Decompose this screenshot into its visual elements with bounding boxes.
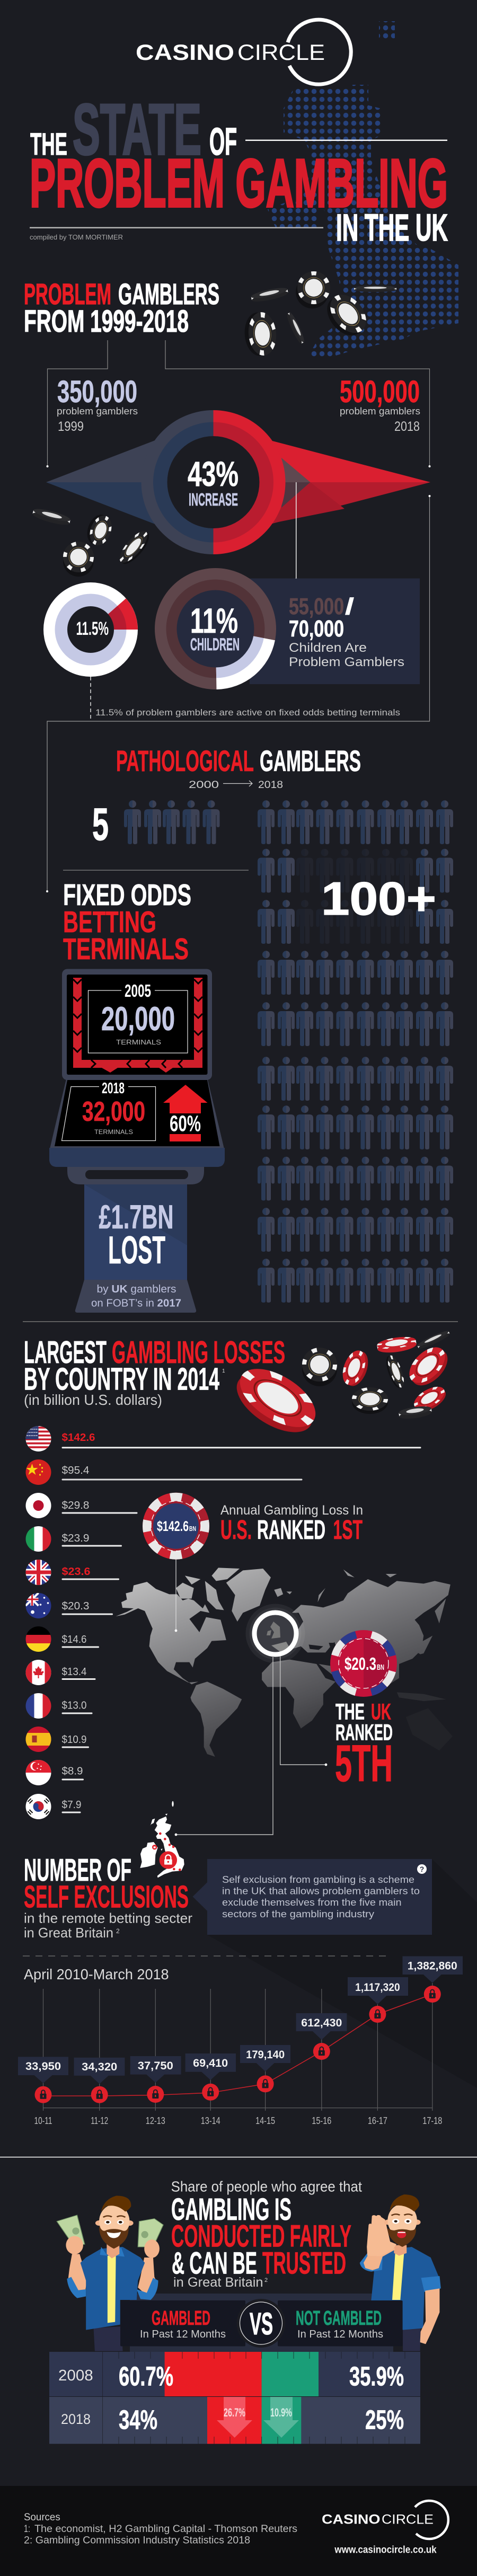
logo: CASINO <box>136 40 234 65</box>
stat: 500,000 in 2018: problem gamblers <box>340 406 420 417</box>
divider line <box>23 1321 458 1322</box>
sources: 1: <box>24 2524 30 2535</box>
footer <box>0 2486 477 2576</box>
column with losses: by UK gamblers <box>96 1283 176 1295</box>
heading: pathological gamblers: 2000 <box>189 780 219 791</box>
compass chart: 43% increase: 43% <box>188 454 238 493</box>
heading: number of self exclusions <box>24 1853 192 1941</box>
column with losses: on FOBT’s in 2017 <box>91 1297 181 1309</box>
callout text: US ranked 1st: 1ST <box>333 1515 363 1545</box>
heading: share of people: in Great Britain <box>173 2275 263 2290</box>
title: STATE <box>73 89 201 170</box>
title <box>30 89 448 249</box>
panel: children: Problem Gamblers <box>289 655 404 669</box>
heading: pathological gamblers: GAMBLERS <box>260 744 361 777</box>
VS badge <box>236 2299 285 2348</box>
panel: self exclusion explanation: sectors of the gambling industry <box>222 1909 374 1919</box>
2018 box: 2018 <box>102 1080 125 1097</box>
bar: Singapore <box>25 1760 84 1785</box>
data point 14-15 <box>240 2045 290 2126</box>
row 2018: 25% <box>365 2405 404 2435</box>
footer logo <box>322 2501 448 2556</box>
icon: question mark <box>417 1864 427 1874</box>
heading: fixed odds betting terminals: FIXED ODDS <box>63 878 191 912</box>
donut chart: 11.5% <box>43 582 138 677</box>
arrow: gambled down 26.7% <box>217 2397 252 2438</box>
data point 17-18: 1,382,860 <box>408 1960 457 1972</box>
VS badge: VS <box>250 2307 273 2341</box>
betting terminal machine <box>49 969 225 1313</box>
backing strip behind versus panels <box>130 2294 393 2352</box>
callout: US chip: BN <box>189 1525 196 1533</box>
2018 box <box>61 1080 156 1140</box>
heading: problem gamblers <box>24 277 219 339</box>
heading: largest gambling losses: LARGEST <box>24 1335 107 1370</box>
bar: South Korea: $7.9 <box>61 1799 82 1811</box>
heading: fixed odds betting terminals: TERMINALS <box>63 932 189 966</box>
connector frame lines <box>47 340 430 467</box>
panel: children: 70,000 <box>289 616 344 642</box>
heading: problem gamblers: PROBLEM <box>24 277 111 311</box>
bar: France: $13.0 <box>61 1700 87 1712</box>
panel: not gambled: In Past 12 Months <box>297 2329 383 2340</box>
2005 box: TERMINALS <box>116 1038 161 1046</box>
stat: 500,000 in 2018 <box>340 375 420 434</box>
panel: children: Children Are <box>289 641 367 655</box>
data point 15-16: 15-16 <box>312 2115 331 2126</box>
stat: 5 gamblers: 5 <box>92 799 109 850</box>
panel: self exclusion explanation: Self exclusion from gambling is a scheme <box>222 1874 414 1885</box>
callout text: UK ranked 5th <box>335 1699 393 1792</box>
callout text: US ranked 1st: RANKED <box>257 1515 325 1545</box>
connector to children panel <box>295 482 297 580</box>
heading: largest gambling losses: BY COUNTRY IN 2014 <box>24 1362 219 1397</box>
bar: Germany <box>25 1626 99 1652</box>
bar: United States: $142.6 <box>61 1432 95 1444</box>
data point 15-16: 612,430 <box>301 2017 342 2029</box>
illustration: man gesturing stop <box>359 2194 441 2351</box>
data point 12-13: 12-13 <box>146 2115 165 2126</box>
heading: share of people: CONDUCTED FAIRLY <box>171 2219 351 2254</box>
data point 17-18: 17-18 <box>422 2115 442 2126</box>
logo <box>136 20 351 84</box>
bar: Germany: $14.6 <box>61 1634 87 1645</box>
data point 17-18 <box>403 1957 463 2126</box>
data point 12-13: 37,750 <box>138 2060 173 2072</box>
heading: largest gambling losses <box>24 1335 285 1408</box>
connector to UK rank <box>280 1656 327 1766</box>
callout text: US ranked 1st: U.S. <box>220 1515 252 1545</box>
sources: 2: Gambling Commission Industry Statistics 2018 <box>24 2535 250 2546</box>
column with losses <box>75 1182 196 1313</box>
panel: self exclusion explanation: in the UK that allows problem gamblers to <box>222 1886 420 1897</box>
data point 12-13 <box>130 2056 181 2126</box>
connector to next section <box>46 495 430 892</box>
bar: Italy: $23.9 <box>61 1533 89 1544</box>
bar: Canada <box>25 1660 95 1685</box>
panel: not gambled <box>278 2300 403 2347</box>
2005 box <box>88 981 188 1053</box>
dashed connector <box>90 677 91 721</box>
footer logo: CASINO <box>322 2512 381 2527</box>
heading: largest gambling losses: (in billion U.S. dollars) <box>24 1392 162 1408</box>
heading: fixed odds betting terminals <box>63 878 191 966</box>
flying red and black chips <box>227 1329 454 1444</box>
comparison table <box>49 2352 420 2444</box>
title: THE <box>30 127 67 162</box>
bar: China: $95.4 <box>61 1465 89 1476</box>
2005 box: 20,000 <box>101 1001 175 1038</box>
heading: number of self exclusions: in Great Britain <box>24 1925 113 1941</box>
heading: number of self exclusions: in the remote betting secter <box>24 1910 192 1926</box>
data point 15-16 <box>296 2013 347 2126</box>
illustration: happy man with money <box>56 2196 164 2351</box>
logo: CIRCLE <box>237 40 325 65</box>
stat: 5 gamblers <box>92 799 219 850</box>
callout text: US ranked 1st: Annual Gambling Loss In <box>220 1503 363 1518</box>
panel: not gambled: NOT GAMBLED <box>296 2307 382 2330</box>
panel: self exclusion explanation <box>193 1859 432 1935</box>
dotted UK map backdrop <box>268 21 458 358</box>
stat: 100+: 100+ <box>321 872 436 925</box>
heading: pathological gamblers: 2018 <box>258 780 283 791</box>
heading: number of self exclusions: 2 <box>116 1927 120 1935</box>
bar: Japan <box>25 1493 138 1518</box>
bar: United Kingdom <box>25 1560 119 1585</box>
data point 10-11 <box>18 2057 68 2126</box>
data point 14-15: 179,140 <box>246 2049 285 2061</box>
heading: largest gambling losses: GAMBLING LOSSES <box>112 1335 285 1370</box>
stat: 350,000 in 1999: problem gamblers <box>57 406 138 417</box>
2005 box: 2005 <box>125 981 151 1001</box>
data point 13-14: 13-14 <box>201 2115 220 2126</box>
stat: 350,000 in 1999: 1999 <box>58 419 84 434</box>
heading: share of people: & CAN BE <box>172 2246 257 2280</box>
row 2008: 60.7% <box>119 2361 173 2392</box>
red chevron border <box>73 978 202 1073</box>
sources: Sources <box>24 2512 60 2523</box>
footer logo: www.casinocircle.co.uk <box>334 2545 437 2556</box>
heading: share of people: 2 <box>264 2277 268 2283</box>
footer logo: CIRCLE <box>382 2512 434 2527</box>
arrow: not gambled down 10.9%: 10.9% <box>270 2406 292 2419</box>
callout: UK chip: BN <box>377 1663 384 1672</box>
2018 box: 32,000 <box>82 1096 145 1127</box>
line chart: self exclusions <box>18 1957 463 2126</box>
sources: The economist, H2 Gambling Capital - Thomson Reuters <box>34 2524 297 2535</box>
world map <box>116 1568 450 1757</box>
bar: United Kingdom: $23.6 <box>61 1566 90 1578</box>
bar: United States <box>25 1426 421 1451</box>
callout: UK chip <box>330 1630 397 1697</box>
data point 11-12 <box>74 2058 125 2126</box>
compass chart: 43% increase <box>46 410 430 554</box>
heading: share of people <box>171 2179 362 2290</box>
column with losses: £1.7BN <box>99 1199 174 1236</box>
heading: pathological gamblers: PATHOLOGICAL <box>116 744 254 777</box>
panel: gambled <box>120 2300 245 2347</box>
panel: self exclusion explanation: exclude themselves from the five main <box>222 1897 402 1908</box>
data point 10-11: 10-11 <box>34 2115 52 2126</box>
heading: number of self exclusions: SELF EXCLUSIONS <box>24 1879 189 1914</box>
bar: Spain <box>25 1727 89 1752</box>
compass chart: 43% increase: INCREASE <box>189 490 238 509</box>
bar: Australia: $20.3 <box>61 1600 89 1612</box>
row 2018 <box>49 2397 420 2444</box>
panel: children: / <box>345 594 354 619</box>
bar: Australia <box>25 1593 113 1618</box>
callout text: UK ranked 5th: 5TH <box>335 1734 393 1792</box>
increase arrow 60%: 60% <box>170 1111 201 1136</box>
falling black chips <box>243 267 396 357</box>
bar: China <box>25 1459 302 1485</box>
data point 16-17: 1,117,320 <box>355 1981 400 1994</box>
data point 10-11: 33,950 <box>25 2060 61 2073</box>
divider line <box>63 870 249 871</box>
chart subtitle: April 2010-March 2018 <box>24 1966 169 1982</box>
bar: Singapore: $8.9 <box>61 1766 83 1777</box>
donut chart: 11% children: CHILDREN <box>190 635 240 654</box>
heading: share of people: Share of people who agree that <box>171 2179 362 2195</box>
callout: UK chip: $20.3 <box>344 1654 376 1674</box>
sources <box>24 2512 297 2546</box>
bar: Spain: $10.9 <box>61 1734 87 1746</box>
bar: Canada: $13.4 <box>61 1666 87 1678</box>
arrow: gambled down 26.7%: 26.7% <box>224 2406 245 2419</box>
callout text: UK ranked 5th: RANKED <box>335 1720 393 1746</box>
panel shadow <box>207 1859 477 2088</box>
callout text: UK ranked 5th: THE <box>335 1699 365 1724</box>
heading: problem gamblers: GAMBLERS <box>118 277 219 311</box>
UK map icon with locks <box>140 1801 184 1878</box>
data point 13-14 <box>186 2053 236 2126</box>
panel: gambled: In Past 12 Months <box>140 2329 226 2340</box>
stat: 500,000 in 2018: 2018 <box>394 419 420 434</box>
data point 16-17 <box>348 1977 408 2126</box>
stat: 350,000 in 1999: 350,000 <box>57 375 137 409</box>
row 2008 <box>49 2352 420 2396</box>
bar: South Korea <box>25 1794 82 1819</box>
data point 13-14: 69,410 <box>193 2057 228 2069</box>
heading: pathological gamblers <box>116 744 361 791</box>
pictogram: 100+ gamblers <box>258 800 453 1303</box>
author credit: compiled by TOM MORTIMER <box>30 233 123 241</box>
spotlight ring on the UK <box>246 1604 305 1663</box>
small black chips <box>32 507 154 577</box>
arrow: not gambled down 10.9% <box>263 2397 299 2438</box>
data point 11-12: 34,320 <box>82 2061 117 2073</box>
donut chart: 11% children: 11% <box>190 601 238 640</box>
heading: number of self exclusions: NUMBER OF <box>24 1853 131 1888</box>
data point 11-12: 11-12 <box>91 2115 108 2126</box>
callout text: US ranked 1st <box>220 1503 363 1545</box>
panel: children <box>155 568 420 689</box>
panel: gambled: GAMBLED <box>152 2307 210 2330</box>
heading: fixed odds betting terminals: BETTING <box>63 905 156 939</box>
panel: children: 55,000 <box>289 594 344 619</box>
data point 14-15: 14-15 <box>255 2115 275 2126</box>
heading: largest gambling losses: 1 <box>222 1368 225 1374</box>
bar: France <box>25 1693 92 1719</box>
bar chart: losses by country <box>25 1426 421 1819</box>
bar: Japan: $29.8 <box>61 1500 89 1511</box>
title: OF <box>209 121 237 163</box>
data point 16-17: 16-17 <box>368 2115 387 2126</box>
icon: question mark: ? <box>420 1865 424 1873</box>
donut chart: 11% children <box>155 568 276 689</box>
caption: fixed odds share: 11.5% of problem gamblers are active on fixed odds betting terminals <box>95 707 400 718</box>
2018 box: TERMINALS <box>94 1128 133 1136</box>
versus header <box>120 2299 403 2348</box>
row 2018: 2018 <box>61 2411 91 2427</box>
column with losses: LOST <box>108 1229 165 1272</box>
connector to self exclusions <box>175 1656 273 1836</box>
heading: share of people: TRUSTED <box>262 2246 346 2280</box>
callout: US chip: $142.6 <box>157 1518 189 1534</box>
row 2018: 34% <box>119 2405 157 2435</box>
stat: 500,000 in 2018: 500,000 <box>340 375 420 409</box>
donut chart: 11.5%: 11.5% <box>76 618 109 639</box>
callout text: UK ranked 5th: UK <box>371 1699 391 1724</box>
heading: problem gamblers: FROM 1999-2018 <box>24 304 189 339</box>
bar: Italy <box>25 1526 122 1552</box>
heading: share of people: GAMBLING IS <box>171 2192 292 2227</box>
increase arrow 60% <box>163 1085 208 1141</box>
callout: US chip <box>143 1493 209 1632</box>
stat: 350,000 in 1999 <box>57 375 138 434</box>
row 2008: 2008 <box>58 2367 93 2384</box>
row 2008: 35.9% <box>349 2361 404 2392</box>
